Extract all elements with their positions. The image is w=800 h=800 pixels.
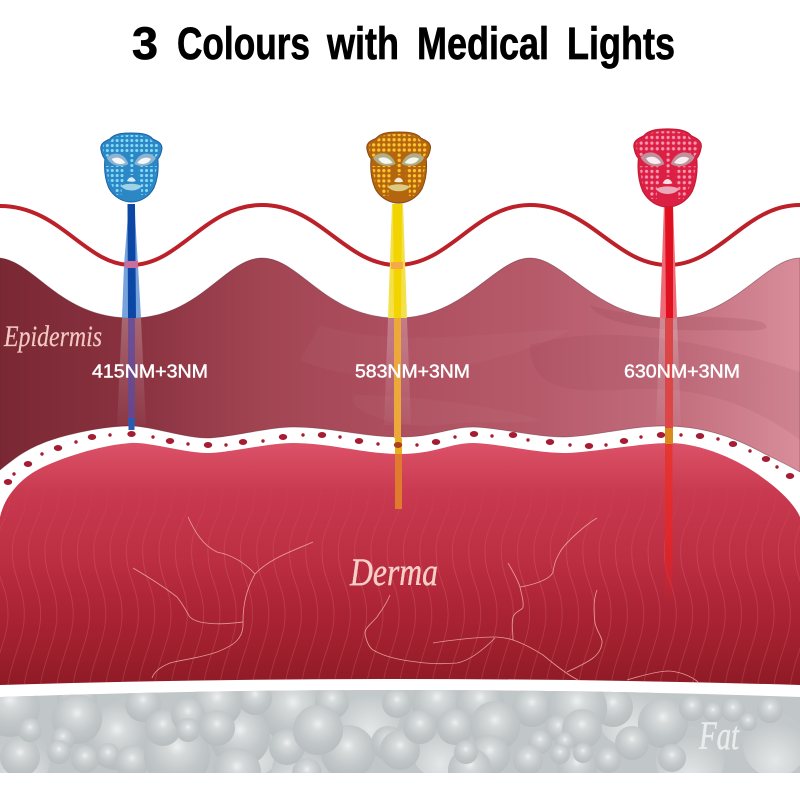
wavelength label: yellow: 583NM+3NM [355,362,470,382]
icon: amber LED mask [367,132,431,203]
layer label: Epidermis: Epidermis [3,320,102,353]
title: Medical [417,18,549,69]
title: 3 [132,18,158,69]
panel: derma layer [0,443,800,685]
wavelength label: red: 630NM+3NM [624,362,740,382]
yellow light beam [384,204,411,509]
blue light beam [117,204,146,437]
dotted basement membrane [4,431,794,485]
layer label: Derma: Derma [349,551,438,594]
red surface wave line [0,205,800,265]
red light beam [656,204,681,604]
title [132,18,675,69]
title: Lights [567,18,675,69]
title: Colours [177,18,310,69]
icon: red LED mask [634,129,701,207]
icon: blue LED mask [101,133,162,202]
wavelength label: blue: 415NM+3NM [92,362,208,382]
nerve vessels [133,517,698,682]
panel: fat layer [0,690,800,773]
panel: epidermis layer [0,258,800,472]
title: with [326,18,399,69]
layer label: Fat: Fat [698,713,740,758]
